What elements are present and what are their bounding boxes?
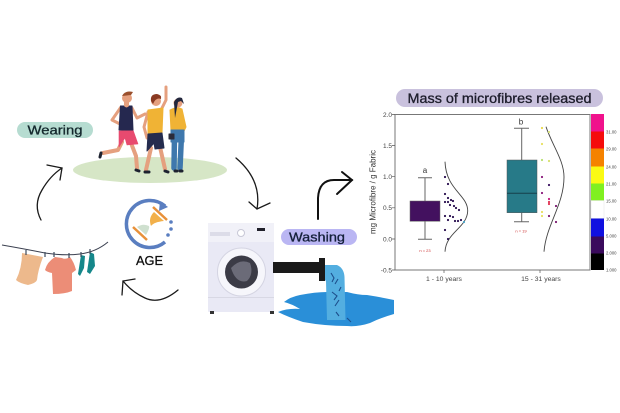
colour scale legend: 1.000 (606, 268, 617, 272)
water puddle (278, 292, 394, 326)
data points group 1 (444, 176, 465, 240)
chart title: Mass of microfibres released (408, 91, 592, 106)
label: Washing: Washing (289, 230, 345, 244)
x axis labels: 1 - 10 years (426, 276, 463, 283)
distribution curves (445, 162, 468, 252)
washing machine (208, 223, 274, 314)
y axis labels: 0.0 (383, 236, 392, 244)
arrow: clothes to wearing (37, 165, 62, 220)
y axis labels: 1.0 (383, 174, 392, 181)
colour scale legend: 5.000 (606, 234, 617, 238)
box plot chart (368, 112, 590, 283)
icon: age hourglass (126, 200, 173, 248)
y axis labels: 2.0 (383, 112, 392, 119)
box 1: n = 23 (419, 248, 431, 253)
data points group 2 (541, 127, 557, 223)
label: Washing (281, 229, 357, 245)
x axis labels: 15 - 31 years (521, 276, 561, 283)
label: Wearing: Wearing (28, 123, 83, 137)
runner (100, 92, 145, 171)
y axis title: mg Microfibre / g Fabric (368, 150, 378, 234)
drain pipe (273, 258, 325, 281)
colour scale legend: 29.00 (606, 146, 617, 152)
arrow: washing to age (122, 279, 178, 300)
box 1 (410, 166, 440, 253)
x axis labels (426, 276, 561, 283)
box 2: b (519, 118, 524, 126)
arrow: wearing to washing (236, 158, 270, 209)
group of people on grass (73, 87, 227, 183)
box 2: n = 19 (515, 228, 527, 234)
man waving (144, 87, 168, 172)
box 2 (507, 118, 537, 234)
colour scale legend: 2.000 (606, 250, 617, 256)
pink tee (45, 257, 76, 294)
colour scale legend: 10.00 (606, 216, 617, 222)
y axis labels (381, 112, 392, 274)
chart title (396, 89, 603, 107)
water stream and microfibres (325, 265, 351, 322)
y axis labels: 1.5 (383, 143, 392, 150)
axes ticks (392, 114, 540, 273)
y axis labels: -0.5 (381, 268, 392, 274)
label: AGE: AGE (136, 254, 163, 268)
colour scale legend: 31.00 (606, 130, 617, 134)
box 1: a (423, 166, 428, 175)
teal socks (78, 252, 95, 276)
tan shirt (16, 253, 43, 285)
clothesline with clothes (2, 242, 108, 294)
colour scale legend: 21.00 (606, 182, 617, 186)
colour scale legend: 24.00 (606, 164, 617, 170)
arrow: washing to chart (318, 172, 352, 219)
colour scale legend (591, 114, 617, 272)
woman (169, 98, 186, 171)
colour scale legend: 15.00 (606, 198, 617, 204)
label: Wearing (17, 122, 93, 138)
y axis labels: 0.5 (383, 205, 392, 212)
